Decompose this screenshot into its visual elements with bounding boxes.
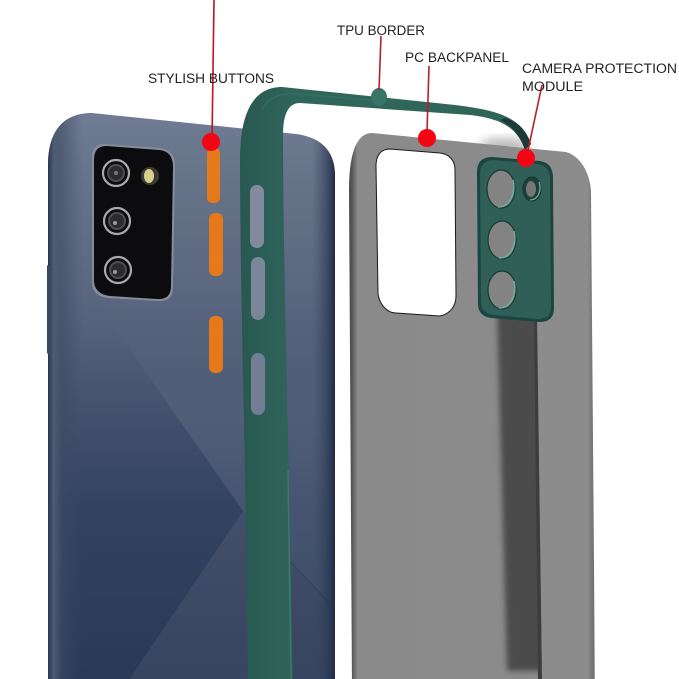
- module hole 1: [487, 170, 515, 208]
- frame cutout 3: [251, 353, 265, 415]
- soft shadow behind frame end: [479, 138, 531, 154]
- lens 3: [105, 257, 131, 283]
- lower frame highlight: [288, 470, 291, 679]
- phone back: [47, 113, 335, 679]
- green camera protection module: [477, 157, 554, 322]
- callout: camera protection module: CAMERA PROTECTION: [522, 61, 677, 76]
- callout: camera protection module: MODULE: [522, 79, 583, 94]
- frame side and top band: [240, 87, 531, 679]
- callout: stylish buttons: STYLISH BUTTONS: [148, 71, 274, 86]
- frame cutout 2: [251, 257, 265, 320]
- module hole 4: [488, 271, 516, 309]
- frame cutout 1: [250, 185, 264, 248]
- module hole 2: [523, 177, 541, 201]
- panel body: [349, 133, 595, 679]
- dark end of frame: [500, 118, 531, 150]
- callout: stylish buttons: [148, 0, 274, 151]
- camera module on phone: [92, 144, 175, 301]
- diagonal back pattern: [95, 300, 335, 679]
- TPU node: [371, 88, 387, 106]
- flash: [141, 167, 159, 185]
- phone edge shading: [48, 113, 335, 679]
- window: [376, 149, 456, 316]
- callout: PC backpanel: PC BACKPANEL: [405, 50, 509, 65]
- grey PC back panel: [349, 133, 595, 679]
- side buttons: [47, 265, 50, 354]
- callout: TPU border: TPU BORDER: [337, 23, 425, 38]
- stylish orange buttons: [207, 148, 223, 373]
- callout: PC backpanel: [405, 50, 509, 147]
- green TPU frame: [240, 87, 531, 679]
- callout: camera protection module: [517, 61, 677, 167]
- phone body: [48, 113, 335, 679]
- highlight on frame curve: [262, 94, 372, 110]
- dark module shadow: [497, 310, 548, 679]
- module hole 3: [488, 221, 516, 259]
- lens 1: [103, 160, 129, 186]
- callout: TPU border: [337, 23, 425, 90]
- lens 2: [104, 208, 130, 234]
